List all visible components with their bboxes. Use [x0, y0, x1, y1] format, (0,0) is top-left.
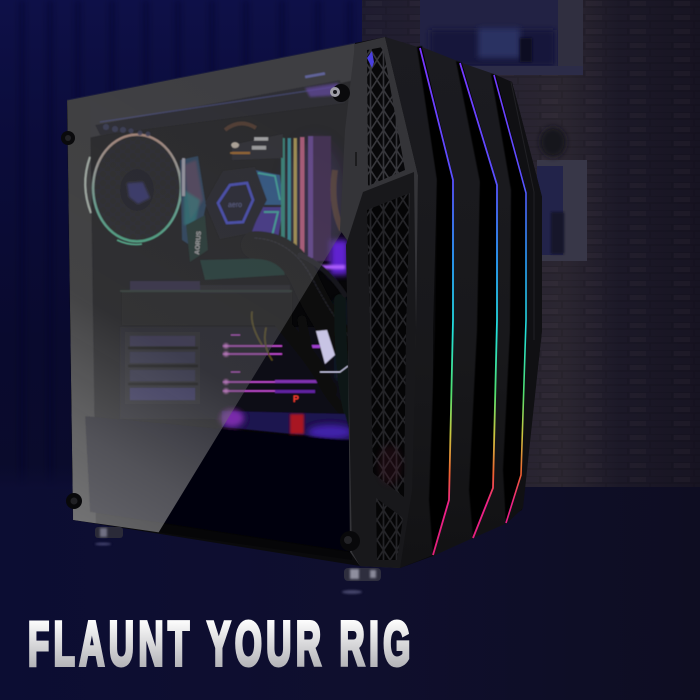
- top frame band: [90, 44, 355, 138]
- curtain: [0, 0, 365, 490]
- pump hexagon: aero: [228, 202, 242, 209]
- motherboard purple details: [275, 240, 348, 393]
- floor: [0, 487, 700, 700]
- vertical slot: [355, 152, 357, 166]
- motherboard glow: [285, 140, 345, 260]
- top mounting holes: [103, 124, 150, 136]
- lower mesh: [367, 193, 410, 497]
- panel 4: [496, 75, 542, 524]
- upper mesh: [367, 47, 405, 186]
- basement plate: [220, 409, 352, 440]
- pci glow: [224, 344, 228, 394]
- thumbscrew top left: [61, 131, 75, 145]
- title: FLAUNT YOUR RIG: [28, 609, 415, 679]
- thumbscrew bottom right: [340, 531, 360, 551]
- channel 2: [456, 61, 498, 538]
- pump hexagon: [206, 170, 268, 234]
- glare on glass: [67, 43, 355, 535]
- panel 3: [462, 63, 512, 538]
- curtain to floor fade: [0, 465, 365, 489]
- fan: [85, 134, 182, 244]
- thumbscrew bottom left: [66, 493, 82, 509]
- lower board area: [218, 326, 342, 419]
- ridged panels: [385, 37, 542, 568]
- white logo: [316, 330, 348, 372]
- channel 3: [491, 74, 527, 524]
- case back shadow: [67, 37, 542, 568]
- psu cables side colour: [334, 170, 342, 230]
- rgb strip 1: [420, 48, 453, 555]
- red mesh glow: [378, 445, 402, 485]
- case foot right: [342, 568, 381, 594]
- channel 1: [417, 46, 454, 556]
- lower shelf: [537, 160, 587, 261]
- glass dimming: [83, 72, 340, 427]
- sleeved cables: [252, 238, 352, 420]
- brand label: AORUS: [194, 230, 203, 255]
- green block: [200, 258, 285, 280]
- expansion slots: [128, 336, 198, 400]
- pump side heatsinks: [252, 170, 282, 236]
- case foot left: [95, 527, 123, 546]
- computer case: [60, 37, 542, 570]
- graphics card: [120, 281, 292, 325]
- shelf ornaments: [540, 127, 566, 157]
- interior components: [67, 43, 355, 552]
- glass top highlight: [67, 43, 355, 100]
- front lower body: [346, 172, 416, 568]
- vrm heatsink: [180, 156, 206, 250]
- psu shroud: [85, 416, 349, 512]
- case interior behind glass: [60, 40, 360, 570]
- brick wall: [362, 0, 700, 487]
- front panel: [340, 37, 418, 568]
- brand label: [186, 215, 208, 262]
- top ventilation strip: [95, 72, 345, 135]
- rgb strip 3: [494, 75, 526, 523]
- pipes and reservoir top: [225, 123, 283, 160]
- upper shelf: [420, 0, 583, 75]
- thumbscrew top right: [330, 84, 350, 102]
- panel edge highlight: [511, 82, 534, 340]
- front frame: [340, 37, 418, 568]
- memory modules: [281, 136, 331, 261]
- panel 1: [385, 37, 437, 568]
- left frame: [67, 96, 96, 530]
- post code display: P: [293, 394, 299, 404]
- bottom mesh: [376, 498, 403, 560]
- blue logo: [367, 51, 374, 68]
- panel 2: [422, 47, 480, 556]
- rgb strip 2: [460, 63, 497, 538]
- pci lights: [223, 335, 282, 391]
